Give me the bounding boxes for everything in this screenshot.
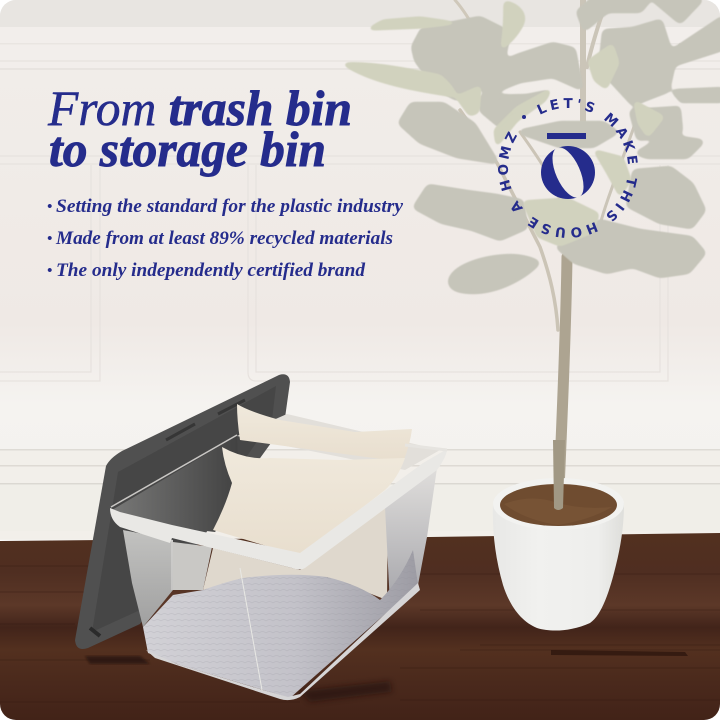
- bin rim: [110, 449, 447, 570]
- wall panel mouldings: [0, 156, 720, 381]
- headline: [47, 80, 352, 177]
- front pillow: [213, 447, 405, 556]
- bin interior: [113, 453, 232, 532]
- wood floor: [0, 533, 720, 720]
- circular logo badge: [498, 98, 638, 238]
- crown moulding: [0, 68, 720, 70]
- bullet: certified brand: The only independently certified brand: [56, 261, 366, 281]
- bottom lip: [146, 583, 420, 700]
- logo: letter o: [541, 146, 595, 199]
- headline: to storage bin: [49, 121, 326, 177]
- bullet: plastic industry standard: •: [47, 199, 52, 215]
- bullet list: [47, 197, 404, 281]
- ring slogan: LET'S MAKE THIS HOUSE A HOMZ: [498, 98, 638, 238]
- clear storage bin: [110, 404, 447, 700]
- see-through left wall: [123, 530, 173, 627]
- bullet: plastic industry standard: Setting the standard for the plastic industry: [56, 197, 404, 217]
- wall: [0, 70, 720, 540]
- logo: macron bar: [547, 133, 586, 139]
- ring dot: [522, 115, 526, 119]
- back pillow: [237, 404, 412, 462]
- plant pot: [493, 440, 624, 631]
- see-through right wall: [385, 470, 436, 590]
- cream pillow through plastic: [203, 505, 388, 600]
- bullet: recycled materials: •: [47, 231, 52, 247]
- baseboard: [0, 449, 720, 484]
- trunk and branches: [455, 0, 680, 490]
- fiddle leaf plant: [344, 0, 720, 490]
- blanket: [143, 550, 418, 698]
- headline: From trash bin: [47, 80, 352, 136]
- pale green leaves: [344, 2, 663, 245]
- storage bin lid: [75, 374, 290, 649]
- bullet: certified brand: •: [47, 263, 52, 279]
- bullet: recycled materials: Made from at least 89% recycled materials: [55, 229, 393, 249]
- dark leaves: [401, 0, 720, 291]
- potting soil: [500, 484, 617, 526]
